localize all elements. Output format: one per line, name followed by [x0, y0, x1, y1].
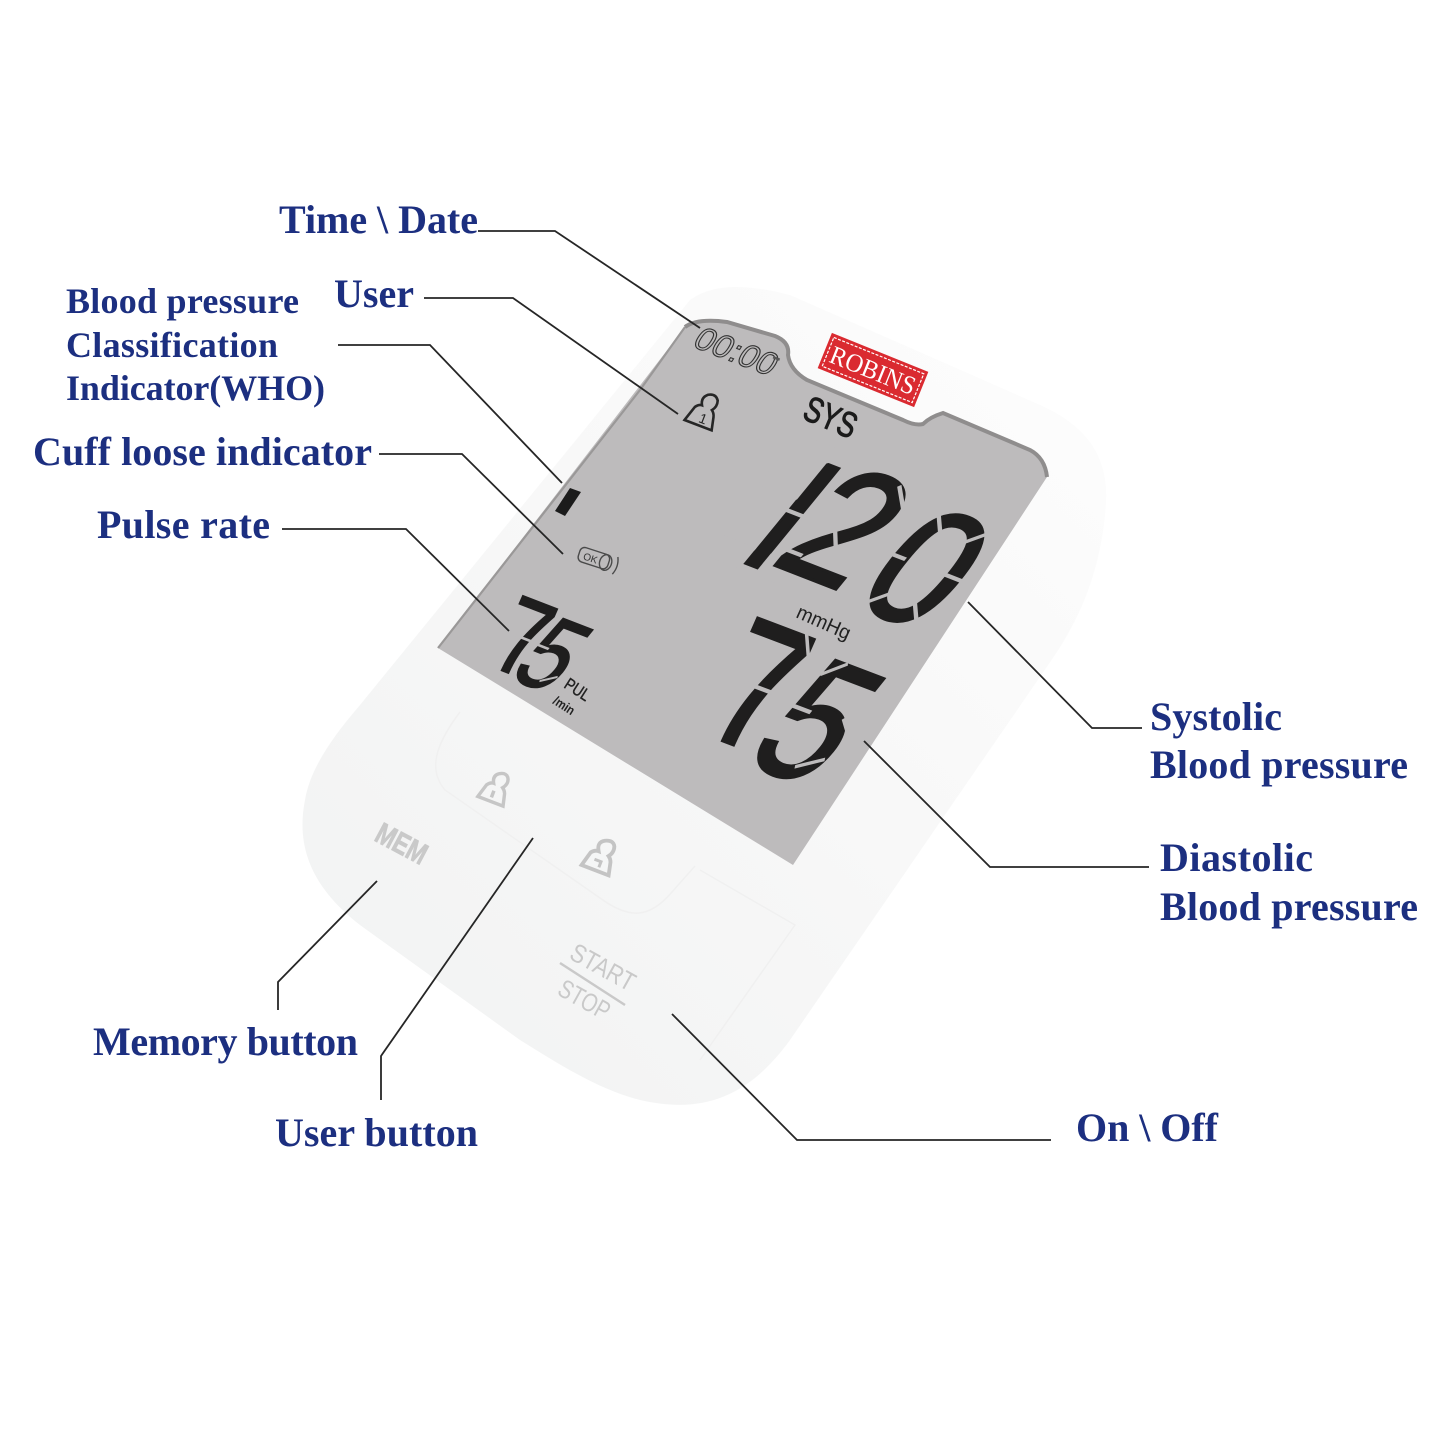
label: pulse rate: Pulse rate — [97, 502, 270, 547]
label: user button: User button — [275, 1110, 478, 1155]
leader line: classification — [338, 345, 562, 483]
systolic reading: 20 — [737, 433, 1035, 663]
leader line: user — [424, 298, 678, 414]
pulse reading: 5 — [491, 598, 614, 713]
classification indicator bar — [555, 488, 581, 516]
time display am/pm mark — [773, 356, 780, 361]
diastolic reading: 5 — [715, 625, 920, 820]
icon: cuff loose indicator — [576, 545, 620, 575]
LCD screen — [438, 321, 1047, 865]
icon: user button 2 — [582, 835, 620, 875]
label: diastolic — [1160, 835, 1418, 929]
LCD left edge shadow — [438, 327, 685, 648]
leader line: on off — [672, 1014, 1051, 1140]
label: systolic: Blood pressure — [1150, 742, 1408, 787]
MEM button label: MEM — [370, 817, 433, 872]
label: cuff loose: Cuff loose indicator — [33, 429, 372, 474]
icon: user 1 on LCD — [685, 389, 724, 430]
diastolic reading: 7 — [684, 580, 836, 795]
label: time date: Time \ Date — [279, 197, 478, 242]
label: blood pressure classification: Blood pressure — [66, 281, 299, 321]
leader line: user button — [381, 838, 533, 1100]
label: diastolic: Diastolic — [1160, 835, 1313, 880]
leader line: memory — [278, 881, 377, 1010]
logo: ROBINS: ROBINS — [826, 340, 920, 401]
systolic reading: 1 — [687, 420, 893, 610]
leader line: time date — [478, 231, 700, 328]
time display: 00:00 — [687, 321, 785, 383]
PUL label: PUL — [561, 674, 594, 705]
label: blood pressure classification: Classification — [66, 325, 278, 365]
mmHg label: mmHg — [793, 601, 854, 645]
label: user: User — [334, 271, 414, 316]
label: memory button: Memory button — [93, 1019, 358, 1064]
button panel outlines — [436, 712, 795, 1060]
START STOP button label: STOP — [553, 973, 616, 1026]
icon: user button 1 — [478, 768, 514, 806]
monitor body — [302, 287, 1106, 1105]
label: systolic — [1150, 694, 1408, 787]
label: blood pressure classification: Indicator(WHO) — [66, 368, 325, 408]
leader line: diastolic — [864, 741, 1149, 867]
icon: user 1 on LCD: 1 — [697, 410, 710, 428]
label: blood pressure classification — [66, 281, 325, 408]
icon: cuff loose indicator: OK — [582, 552, 599, 567]
label: diastolic: Blood pressure — [1160, 884, 1418, 929]
SYS label: SYS — [798, 388, 864, 446]
leader line: cuff — [379, 454, 563, 554]
label: systolic: Systolic — [1150, 694, 1282, 739]
label: on off: On \ Off — [1076, 1105, 1219, 1150]
START STOP button label — [553, 937, 641, 1026]
pulse reading: 7 — [478, 572, 571, 703]
leader line: systolic — [968, 602, 1142, 728]
leader line: pulse — [282, 529, 509, 631]
START STOP button label: START — [565, 937, 641, 997]
LCD top edge bevel — [685, 321, 1047, 477]
/min label: /min — [550, 693, 578, 718]
